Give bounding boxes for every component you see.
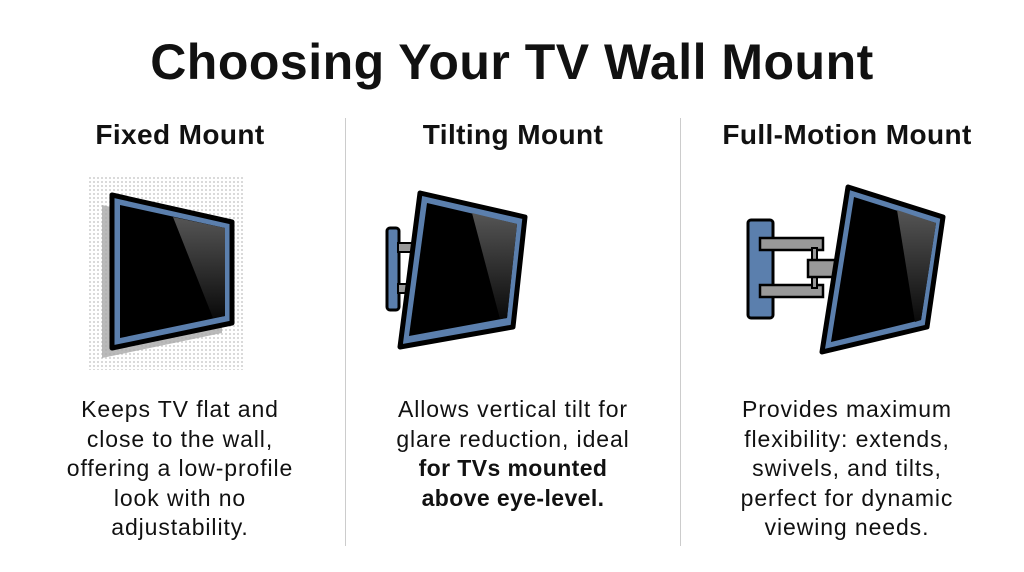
text: tilting mount: glare reduction, ideal	[396, 426, 630, 452]
text: fixed mount: Keeps TV flat and	[81, 396, 279, 422]
text: fixed mount	[67, 396, 293, 540]
text: fixed mount: adjustability.	[111, 514, 249, 540]
heading: tilting mount: Tilting Mount	[423, 119, 603, 150]
text: fixed mount: offering a low-profile	[67, 455, 293, 481]
text: full-motion mount: Provides maximum	[742, 396, 952, 422]
text: full-motion mount: flexibility: extends,	[744, 426, 950, 452]
heading: fixed mount: Fixed Mount	[95, 119, 265, 150]
text: tilting mount: above eye-level.	[422, 485, 604, 511]
icon: tilting mount TV	[387, 193, 525, 347]
text: full-motion mount: perfect for dynamic	[741, 485, 953, 511]
icon: fixed mount TV	[88, 175, 245, 370]
text: full-motion mount: swivels, and tilts,	[752, 455, 942, 481]
icon: full-motion mount TV	[748, 187, 943, 352]
text: tilting mount	[396, 396, 630, 511]
text: full-motion mount: viewing needs.	[765, 514, 929, 540]
title: Choosing Your TV Wall Mount	[150, 34, 874, 90]
heading: full-motion mount: Full-Motion Mount	[722, 119, 972, 150]
text: full-motion mount	[741, 396, 953, 540]
text: tilting mount: Allows vertical tilt for	[398, 396, 628, 422]
text: tilting mount: for TVs mounted	[419, 455, 607, 481]
text: fixed mount: close to the wall,	[87, 426, 273, 452]
text: fixed mount: look with no	[114, 485, 246, 511]
